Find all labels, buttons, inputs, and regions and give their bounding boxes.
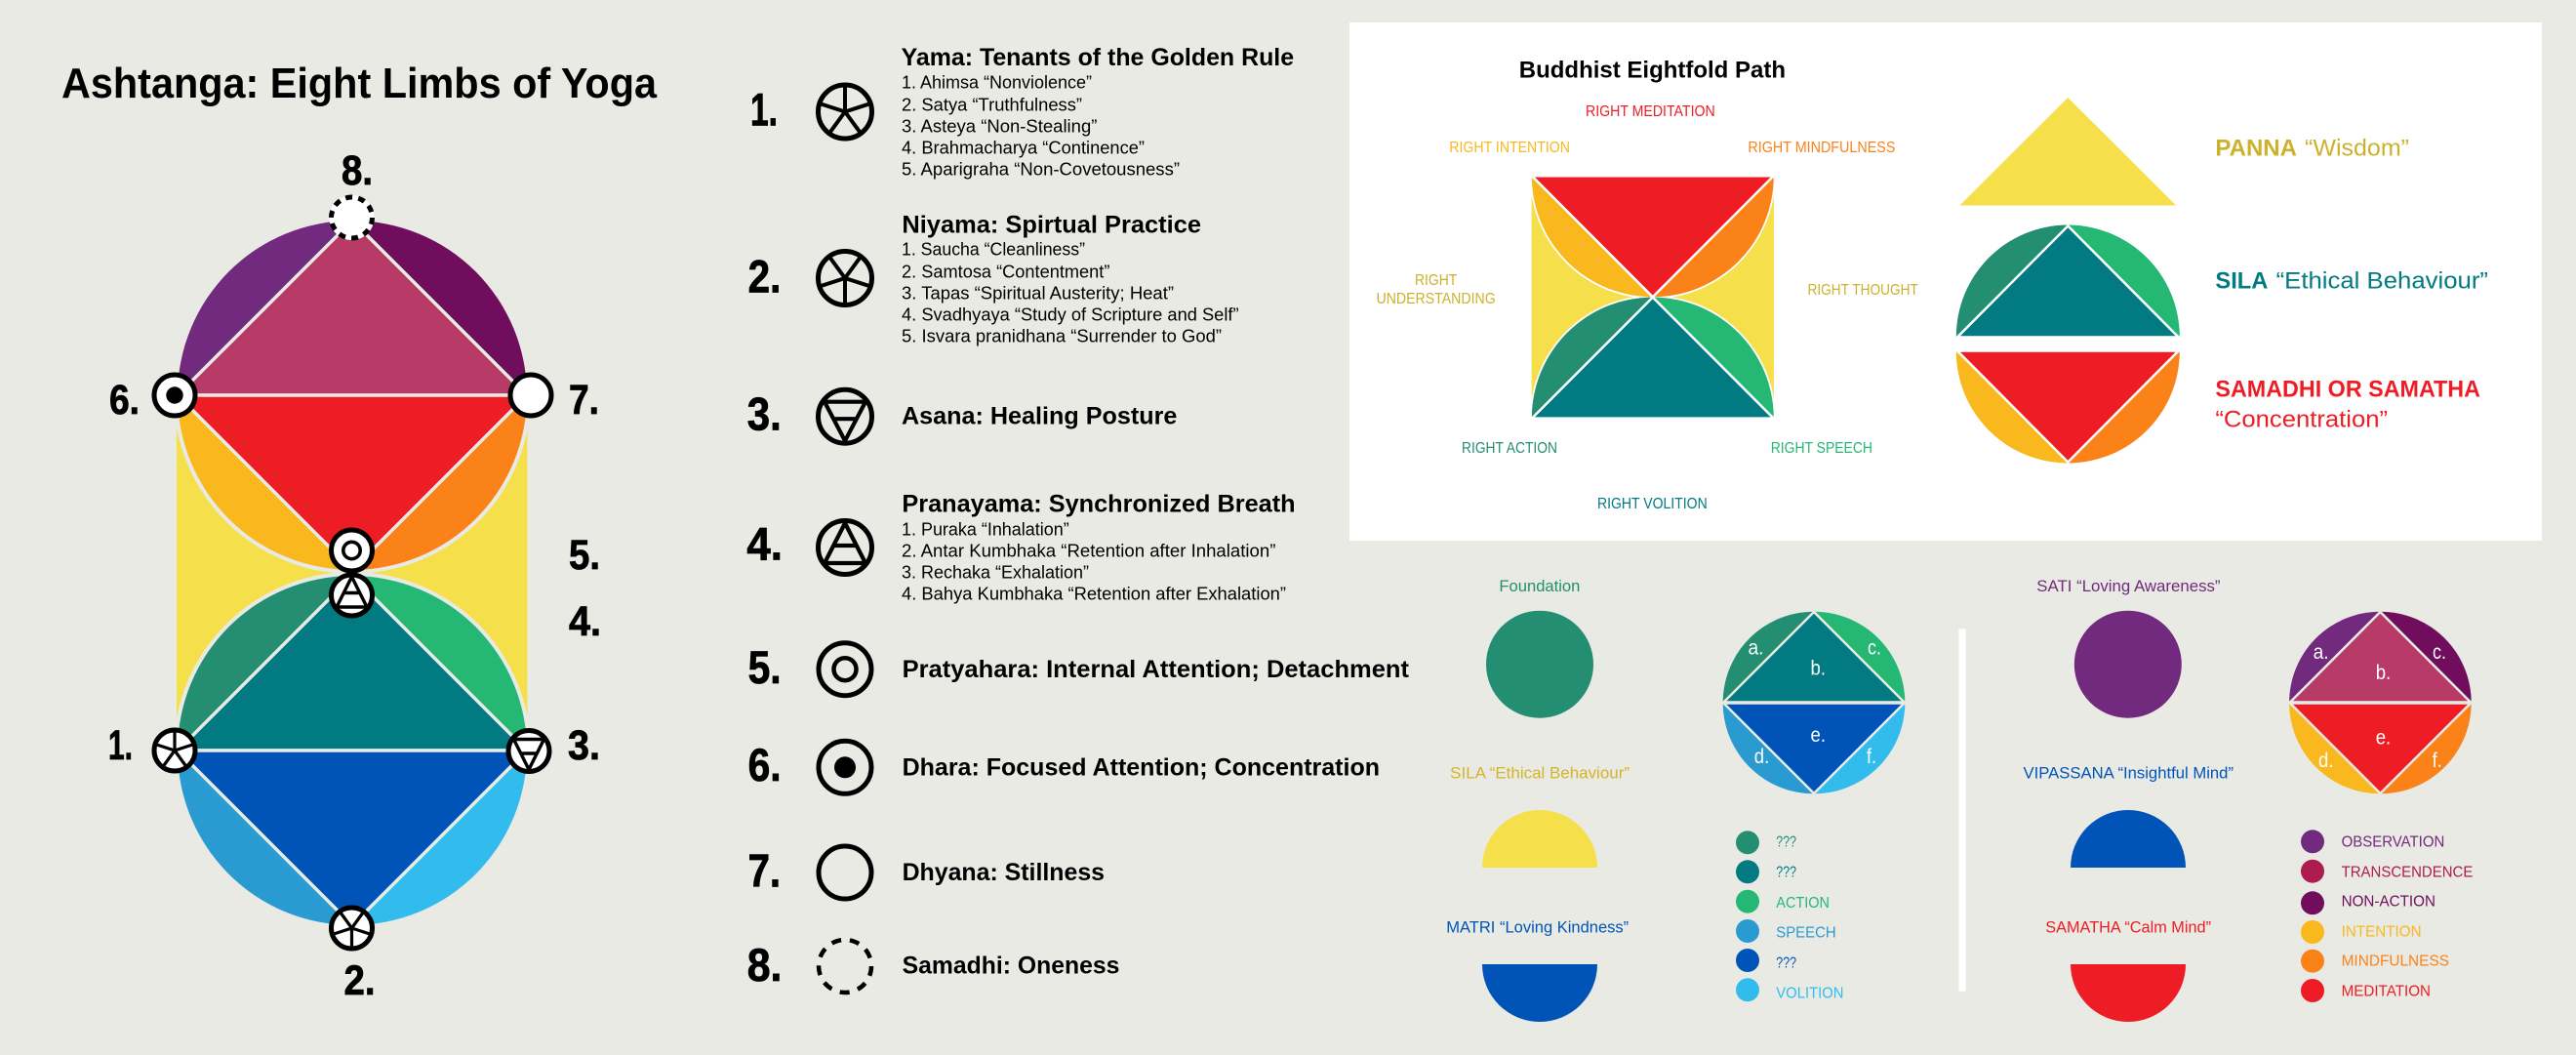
- Matri label: MATRI “Loving Kindness”: [1446, 918, 1629, 936]
- limb 8: Samadhi: Samadhi: Oneness: [903, 952, 1119, 979]
- limb 1: Yama: 3. Asteya “Non-Stealing”: [902, 115, 1097, 136]
- Panna label: [2215, 136, 2409, 162]
- node 2: inverted five spokes: [332, 908, 373, 949]
- panel: green and blue lettered circle: [1723, 612, 1905, 793]
- panel: green and blue lettered circle: d.: [1754, 746, 1769, 768]
- limb 4: Pranayama: 4.: [746, 518, 783, 570]
- limb 2: Niyama: 4. Svadhyaya “Study of Scripture and Self”: [902, 304, 1239, 325]
- eightfold labels: RIGHT SPEECH: [1771, 440, 1872, 457]
- limb 2: Niyama: 5. Isvara pranidhana “Surrender to God”: [902, 326, 1222, 346]
- panel: purple and red lettered circle: b.: [2376, 662, 2391, 684]
- limb 1: Yama: Yama: Tenants of the Golden Rule: [902, 44, 1294, 71]
- limb 2: Niyama: 2. Samtosa “Contentment”: [902, 261, 1109, 281]
- limb 7: Dhyana: [748, 844, 1105, 899]
- diagram number labels: 3.: [568, 722, 600, 769]
- panel: purple and red lettered circle: e.: [2376, 727, 2391, 750]
- eightfold labels: RIGHT THOUGHT: [1807, 282, 1918, 299]
- limb 1: Yama: 5. Aparigraha “Non-Covetousness”: [902, 159, 1180, 180]
- Samadhi label: [2215, 377, 2480, 432]
- panel: green and blue lettered circle: c.: [1868, 637, 1881, 660]
- legend: purple and red: MINDFULNESS: [2342, 953, 2449, 969]
- eightfold labels: RIGHT VOLITION: [1597, 496, 1708, 512]
- panel: foundation column: [1446, 578, 1630, 1022]
- Foundation label: Foundation: [1499, 578, 1580, 595]
- legend: purple and red: [2301, 830, 2473, 1002]
- limb 4: Pranayama: 1. Puraka “Inhalation”: [902, 518, 1069, 539]
- foundation circle: [1486, 611, 1593, 718]
- diagram number labels: 7.: [569, 377, 599, 424]
- Samadhi label: SAMADHI OR SAMATHA: [2215, 377, 2480, 402]
- upper circle: purple and red segments: [178, 221, 527, 570]
- limb 1: Yama: 4. Brahmacharya “Continence”: [902, 137, 1145, 158]
- red half circle: [2071, 964, 2186, 1022]
- panel: limb list: [746, 44, 1410, 993]
- node 3: downward triangle: [508, 730, 549, 771]
- limb 1: Yama: 1. Ahimsa “Nonviolence”: [902, 71, 1092, 92]
- limb 8: Samadhi: 8.: [747, 939, 782, 991]
- title: Ashtanga: Eight Limbs of Yoga: [61, 60, 657, 107]
- limb 1: Yama: [750, 44, 1294, 180]
- limb 5: Pratyahara: [748, 641, 1410, 696]
- limb 4: Pranayama: 4. Bahya Kumbhaka “Retention after Exhalation”: [902, 584, 1286, 604]
- lower circle: green and blue segments: [178, 576, 527, 925]
- legend: purple and red: NON-ACTION: [2342, 893, 2435, 910]
- legend: green and blue: ???: [1776, 834, 1796, 851]
- panel: green and blue lettered circle: e.: [1811, 724, 1826, 747]
- yellow half circle: [1482, 810, 1597, 868]
- blue half circle: [2071, 810, 2186, 868]
- limb 6: Dhara: 6.: [748, 739, 782, 791]
- panel: Buddhist Eightfold Path: [1349, 22, 2542, 541]
- eightfold labels: RIGHT ACTION: [1462, 440, 1557, 457]
- node 7: plain circle: [510, 375, 551, 416]
- legend: purple and red: MEDITATION: [2342, 983, 2431, 999]
- limb 2: Niyama: 1. Saucha “Cleanliness”: [902, 238, 1085, 260]
- eightfold labels: RIGHT MINDFULNESS: [1748, 140, 1895, 156]
- diagram number labels: [108, 147, 601, 1004]
- concentration shape: [1956, 351, 2180, 463]
- panel: purple and red lettered circle: c.: [2433, 641, 2446, 664]
- node 4: upward triangle: [332, 575, 373, 616]
- limb 4: Pranayama: [746, 491, 1296, 604]
- diagram number labels: 8.: [342, 147, 373, 194]
- hourglass diagram: [1532, 176, 1774, 419]
- limb 2: Niyama: Niyama: Spirtual Practice: [902, 212, 1201, 239]
- legend: green and blue: [1736, 831, 1844, 1002]
- Sila label: SILA “Ethical Behaviour”: [1450, 764, 1630, 782]
- Panna label: PANNA: [2215, 136, 2297, 162]
- legend: purple and red: TRANSCENDENCE: [2342, 864, 2473, 880]
- diagram number labels: 5.: [569, 532, 600, 579]
- legend: green and blue: ???: [1776, 865, 1796, 881]
- diagram number labels: 1.: [108, 722, 133, 769]
- ethical behaviour shape: [1956, 224, 2180, 338]
- purple circle: [2074, 611, 2182, 718]
- legend: purple and red: OBSERVATION: [2342, 833, 2444, 850]
- Samadhi label: “Concentration”: [2215, 406, 2388, 432]
- Samatha label: SAMATHA “Calm Mind”: [2045, 918, 2211, 936]
- Sila label: SILA: [2215, 268, 2268, 295]
- node 8: dashed circle: [330, 195, 375, 240]
- legend: purple and red: INTENTION: [2342, 923, 2422, 940]
- panel: green and blue lettered circle: a.: [1749, 637, 1764, 660]
- Panna label: “Wisdom”: [2305, 136, 2409, 162]
- limb 8: Samadhi: [747, 939, 1119, 993]
- limb 2: Niyama: 2.: [748, 250, 781, 302]
- blue half circle: [1482, 964, 1597, 1022]
- panel: green and blue lettered circle: f.: [1867, 746, 1876, 768]
- panel: purple and red lettered circle: f.: [2433, 750, 2442, 772]
- eightfold labels: UNDERSTANDING: [1376, 291, 1496, 307]
- limb 5: Pratyahara: Pratyahara: Internal Attention; Detachment: [903, 656, 1410, 683]
- legend: green and blue: ???: [1776, 955, 1796, 972]
- diagram: eight limbs: [154, 195, 551, 949]
- heading: Buddhist Eightfold Path: [1519, 58, 1786, 84]
- Sila label: “Ethical Behaviour”: [2276, 268, 2488, 295]
- diagram number labels: 2.: [343, 957, 375, 1004]
- Sati label: SATI “Loving Awareness”: [2036, 578, 2221, 595]
- limb 1: Yama: 2. Satya “Truthfulness”: [902, 94, 1082, 114]
- panel: purple and red lettered circle: d.: [2318, 750, 2334, 772]
- limb 2: Niyama: [748, 212, 1239, 346]
- node 1: five spokes: [154, 730, 195, 771]
- limb 2: Niyama: 3. Tapas “Spiritual Austerity; Heat”: [902, 283, 1174, 303]
- eightfold labels: [1376, 103, 1918, 512]
- limb 7: Dhyana: Dhyana: Stillness: [903, 859, 1105, 886]
- eightfold labels: RIGHT: [1415, 272, 1458, 289]
- limb 6: Dhara: Dhara: Focused Attention; Concentration: [903, 754, 1380, 782]
- limb 3: Asana: Asana: Healing Posture: [902, 403, 1177, 430]
- limb 4: Pranayama: 3. Rechaka “Exhalation”: [902, 562, 1089, 583]
- legend: green and blue: SPEECH: [1776, 925, 1836, 942]
- limb 3: Asana: [747, 388, 1177, 443]
- diagram number labels: 6.: [109, 377, 140, 424]
- limb 4: Pranayama: 2. Antar Kumbhaka “Retention after Inhalation”: [902, 541, 1275, 560]
- limb 1: Yama: 1.: [750, 84, 778, 135]
- limb 5: Pratyahara: 5.: [748, 641, 782, 693]
- limb 3: Asana: 3.: [747, 388, 782, 440]
- legend: green and blue: VOLITION: [1776, 986, 1844, 1002]
- eightfold labels: RIGHT MEDITATION: [1586, 103, 1715, 120]
- panel: green and blue lettered circle: b.: [1811, 658, 1826, 680]
- diagram number labels: 4.: [569, 598, 601, 645]
- wisdom triangle: [1959, 98, 2176, 205]
- panel: purple and red lettered circle: [2289, 612, 2472, 793]
- node 6: dot circle: [154, 375, 195, 416]
- limb 7: Dhyana: 7.: [748, 844, 781, 896]
- legend: green and blue: ACTION: [1776, 895, 1830, 912]
- eightfold labels: RIGHT INTENTION: [1449, 140, 1570, 156]
- panel: purple and red lettered circle: a.: [2314, 641, 2329, 664]
- limb 6: Dhara: [748, 739, 1380, 793]
- node 5: ring circle: [332, 530, 373, 571]
- panel: awareness column: [2024, 578, 2234, 1022]
- Vipassana label: VIPASSANA “Insightful Mind”: [2024, 764, 2234, 782]
- limb 4: Pranayama: Pranayama: Synchronized Breath: [902, 491, 1296, 518]
